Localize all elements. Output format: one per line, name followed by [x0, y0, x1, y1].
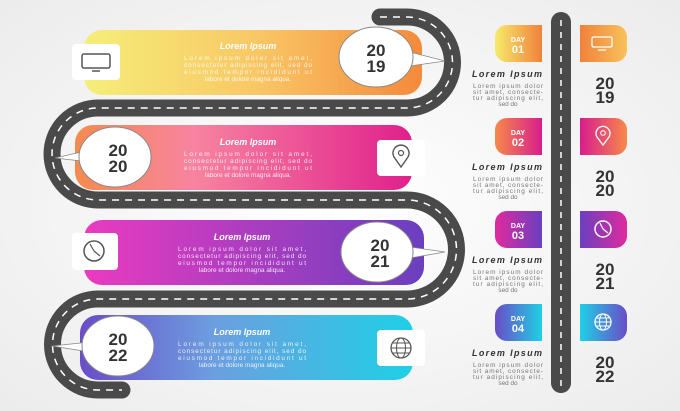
right timeline: day 03: sit amet, consecte-: [473, 275, 543, 282]
panel 3: 2021: consectetur adipiscing elit, sed do: [178, 253, 306, 260]
year bubble 2020: 20: [109, 141, 127, 160]
year bubble 2019: 19: [367, 57, 385, 76]
year bubble 2020: 20: [109, 157, 127, 176]
right timeline: day 04: tur adipiscing elit,: [473, 374, 543, 381]
right timeline: day 04: DAY: [511, 316, 525, 323]
right timeline: day 04: Lorem ipsum dolor: [473, 362, 544, 369]
right timeline: day 02: Lorem Ipsum: [472, 162, 542, 172]
year bubble 2020: [55, 127, 151, 187]
right timeline: day 03: 21: [596, 274, 614, 293]
panel 1: 2019: [72, 27, 445, 95]
heading 1: Lorem Ipsum: [220, 41, 276, 51]
right timeline: day 01: [472, 25, 627, 108]
panel 2: 2020: [55, 125, 425, 190]
right timeline: day 02: DAY: [511, 130, 525, 137]
icon: clock: [72, 233, 118, 270]
vertical road: [551, 12, 571, 393]
panel 2: 2020: labore et dolore magna aliqua.: [205, 172, 291, 179]
right timeline: day 01: tur adipiscing elit,: [473, 95, 543, 102]
panel 2: 2020: Lorem Ipsum: [220, 137, 276, 147]
icon: globe: [377, 330, 425, 366]
right timeline: day 04: sed do: [498, 380, 518, 387]
right timeline: day 02: sed do: [498, 194, 518, 201]
year bubble 2022: [52, 316, 154, 376]
right timeline: day 01: sed do: [498, 101, 518, 108]
text block 1: [184, 55, 312, 83]
panel 4: 2022: consectetur adipiscing elit, sed do: [178, 348, 306, 355]
year bubble 2022: 22: [109, 346, 127, 365]
icon: location pin: [377, 140, 425, 176]
text block 1: labore et dolore magna aliqua.: [205, 76, 291, 83]
right timeline: day 03: Lorem ipsum dolor: [473, 269, 544, 276]
panel 3: 2021: labore et dolore magna aliqua.: [199, 267, 285, 274]
text block 1: Lorem ipsum dolor sit amet,: [184, 55, 312, 62]
right timeline: day 01: 20: [596, 74, 614, 93]
right timeline: day 03: [472, 211, 627, 294]
panel 3: 2021: eiusmod tempor incididunt ut: [178, 260, 306, 267]
panel 2: 2020: eiusmod tempor incididunt ut: [184, 165, 312, 172]
right timeline: day 02: 02: [512, 137, 524, 149]
right timeline: day 04: 22: [596, 367, 614, 386]
right timeline: day 01: sit amet, consecte-: [473, 89, 543, 96]
right timeline: day 01: Lorem Ipsum: [472, 69, 542, 79]
panel 4: 2022: labore et dolore magna aliqua.: [199, 362, 285, 369]
right timeline: day 03: 20: [596, 260, 614, 279]
panel 4: 2022: [52, 315, 425, 380]
year bubble 2021: [341, 222, 445, 282]
right timeline: day 03: tur adipiscing elit,: [473, 281, 543, 288]
right timeline: day 03: DAY: [511, 223, 525, 230]
panel 4: 2022: Lorem ipsum dolor sit amet,: [178, 341, 306, 348]
year bubble 2019: [339, 27, 445, 87]
text block 1: consectetur adipiscing elit, sed do: [184, 62, 312, 69]
right timeline: day 03: sed do: [498, 287, 518, 294]
right timeline: day 02: 20: [596, 167, 614, 186]
winding road: [52, 17, 456, 390]
year bubble 2021: 20: [371, 236, 389, 255]
year bubble 2022: 20: [109, 330, 127, 349]
right timeline: day 01: Lorem ipsum dolor: [473, 83, 544, 90]
year bubble 2021: 21: [371, 252, 389, 271]
panel 2: 2020: Lorem ipsum dolor sit amet,: [184, 151, 312, 158]
panel 4: 2022: eiusmod tempor incididunt ut: [178, 355, 306, 362]
text block 1: eiusmod tempor incididunt ut: [184, 69, 312, 76]
right timeline: day 04: Lorem Ipsum: [472, 348, 542, 358]
panel 3: 2021: Lorem ipsum dolor sit amet,: [178, 246, 306, 253]
right timeline: day 02: 20: [596, 181, 614, 200]
right timeline: day 01: 19: [596, 88, 614, 107]
right timeline: day 02: tur adipiscing elit,: [473, 188, 543, 195]
right timeline: day 03: 03: [512, 230, 524, 242]
right timeline: day 01: 01: [512, 44, 524, 56]
right timeline: day 01: DAY: [511, 37, 525, 44]
right timeline: day 02: [472, 118, 627, 201]
right timeline: day 04: sit amet, consecte-: [473, 368, 543, 375]
panel 2: 2020: consectetur adipiscing elit, sed do: [184, 158, 312, 165]
panel 4: 2022: Lorem Ipsum: [214, 327, 270, 337]
right timeline: day 04: 20: [596, 353, 614, 372]
right timeline: day 04: 04: [512, 323, 525, 335]
right timeline: day 04: [472, 304, 627, 387]
right timeline: day 03: Lorem Ipsum: [472, 255, 542, 265]
panel 3: 2021: Lorem Ipsum: [214, 232, 270, 242]
panel 3: 2021: [72, 220, 445, 285]
right timeline: day 02: sit amet, consecte-: [473, 182, 543, 189]
year bubble 2019: 20: [367, 41, 385, 60]
right timeline: day 02: Lorem ipsum dolor: [473, 176, 544, 183]
icon: monitor: [72, 44, 120, 80]
